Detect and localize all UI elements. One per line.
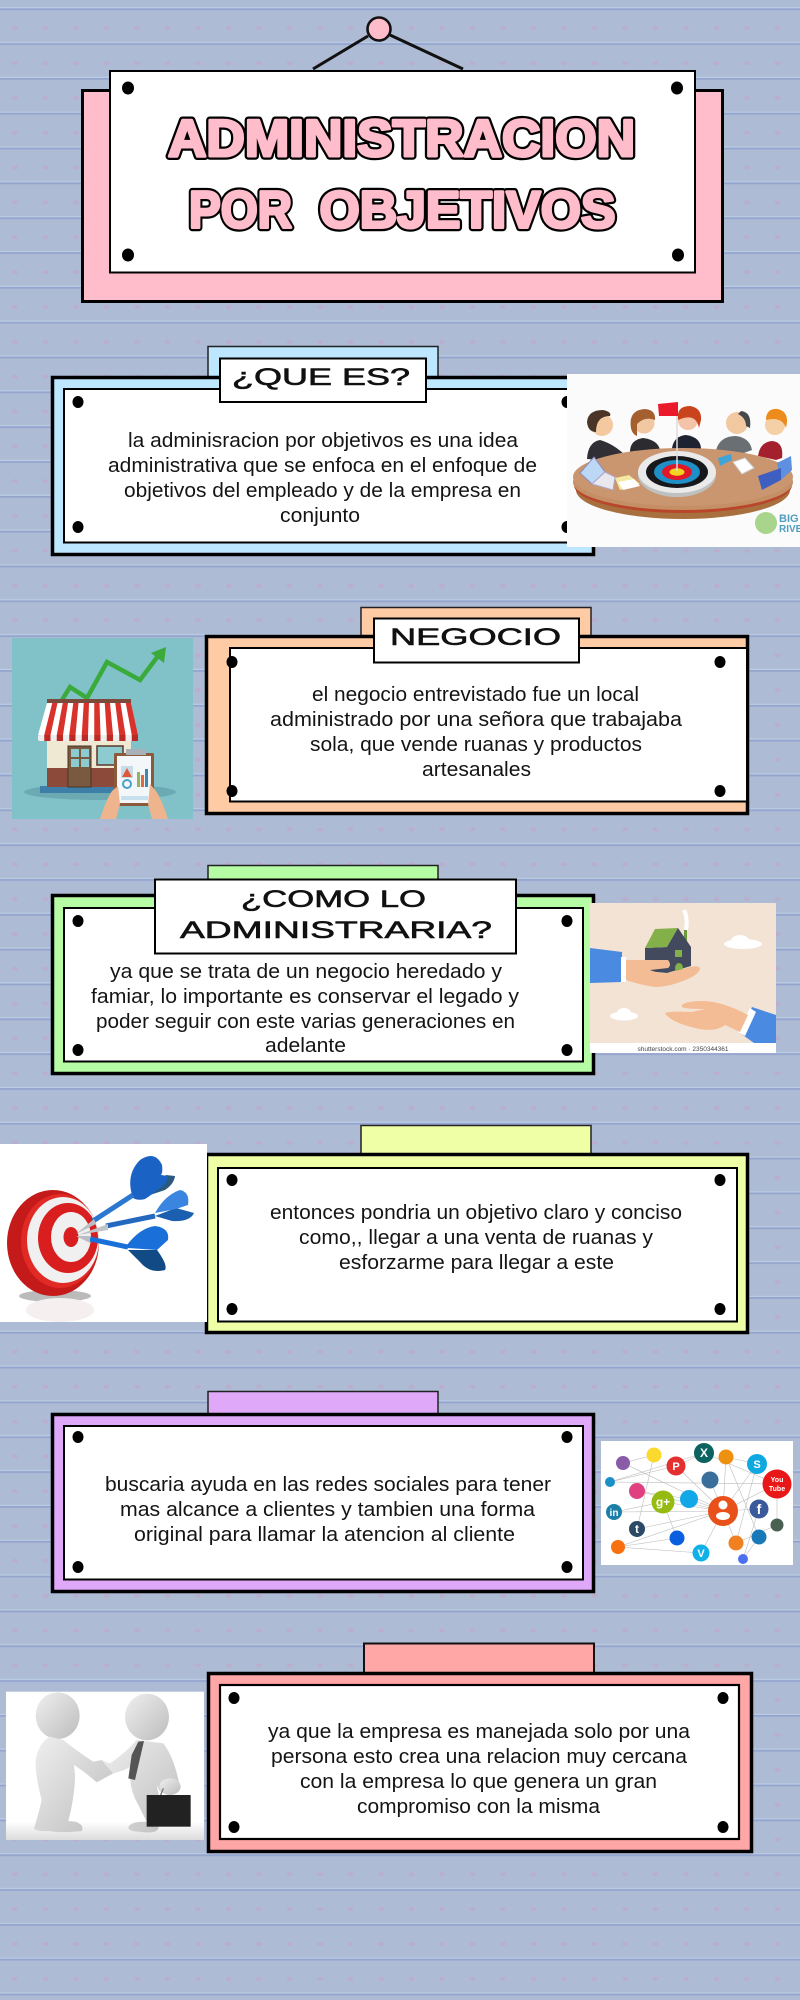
panel: redes sociales — [52, 1392, 594, 1592]
arrow — [62, 656, 158, 700]
node glyphs: You — [771, 1477, 783, 1484]
heading: ¿COMO LO — [241, 886, 426, 913]
left figure — [34, 1692, 113, 1832]
heading — [374, 618, 579, 662]
pink backing — [82, 90, 722, 302]
node glyphs: f — [757, 1501, 762, 1517]
nodes — [605, 1443, 792, 1564]
body text: conjunto — [280, 505, 360, 527]
body text: compromiso con la misma — [357, 1796, 601, 1818]
card backing — [208, 1674, 752, 1852]
dart 3 — [76, 1226, 168, 1271]
image: shop with growth arrow — [12, 638, 193, 819]
node glyphs: t — [635, 1522, 639, 1536]
card body — [64, 389, 583, 542]
card body — [64, 1426, 583, 1580]
title: ADMINISTRACION — [168, 110, 635, 168]
links — [610, 1453, 777, 1559]
image: team meeting around target — [567, 374, 800, 547]
pins — [226, 656, 726, 797]
node glyphs: V — [697, 1548, 705, 1560]
table — [576, 461, 790, 519]
body text: buscaria ayuda en las redes sociales para tener — [105, 1474, 551, 1496]
card backing — [206, 636, 748, 814]
laptops and papers — [580, 457, 605, 484]
shadow — [19, 1290, 91, 1302]
body text: artesanales — [422, 759, 531, 781]
body text: famiar, lo importante es conservar el legado y — [91, 986, 519, 1008]
panel: compromiso — [208, 1644, 752, 1852]
awning — [47, 699, 131, 703]
card body — [64, 908, 583, 1062]
panel: title sign — [82, 18, 722, 302]
panel: como lo administraria — [52, 866, 594, 1074]
card backing — [52, 896, 594, 1074]
body text — [270, 1202, 682, 1274]
target — [638, 453, 716, 497]
body text — [108, 430, 537, 527]
pins — [72, 915, 572, 1056]
body text: sola, que vende ruanas y productos — [310, 734, 642, 756]
node glyphs: S — [753, 1459, 761, 1471]
card body — [220, 1685, 739, 1839]
body text: ya que se trata de un negocio heredado y — [110, 961, 502, 983]
pins — [226, 1174, 726, 1315]
panel: negocio — [206, 608, 748, 814]
body text: objetivos del empleado y de la empresa en — [124, 480, 521, 502]
body text: persona esto crea una relacion muy cercana — [271, 1746, 688, 1768]
pins — [72, 396, 572, 533]
node glyphs: g+ — [656, 1495, 670, 1509]
image: hands passing a house — [590, 903, 776, 1053]
tab — [364, 1644, 594, 1674]
clouds — [724, 939, 762, 949]
card backing — [52, 378, 594, 554]
body text — [105, 1474, 551, 1546]
icon: hanger — [313, 18, 463, 69]
title: ADMINISTRACION — [168, 110, 635, 168]
body text: con la empresa lo que genera un gran — [300, 1771, 657, 1793]
target — [7, 1190, 99, 1296]
people — [587, 406, 787, 462]
image: team meeting around target: BIG — [779, 513, 799, 525]
tab — [208, 1392, 438, 1416]
body text: administrativa que se enfoca en el enfoque de — [108, 455, 537, 477]
tab — [208, 346, 438, 378]
image: darts hitting target — [0, 1144, 207, 1322]
body text: entonces pondria un objetivo claro y conciso — [270, 1202, 682, 1224]
body text: administrado por una señora que trabajaba — [270, 709, 683, 731]
briefcase — [147, 1788, 191, 1827]
body text: adelante — [265, 1035, 346, 1057]
body text: poder seguir con este varias generaciones en — [96, 1011, 515, 1033]
image: social network graph — [601, 1441, 793, 1565]
heading: NEGOCIO — [390, 624, 561, 651]
shop wall — [47, 741, 131, 769]
card backing — [52, 1414, 594, 1592]
clipboard and hands — [114, 753, 154, 806]
logo — [755, 512, 777, 534]
pins — [228, 1692, 728, 1833]
dart 2 — [78, 1190, 194, 1235]
body text: el negocio entrevistado fue un local — [312, 684, 639, 706]
flag — [676, 402, 678, 471]
node glyphs: P — [672, 1461, 680, 1473]
body text: ya que la empresa es manejada solo por una — [268, 1721, 691, 1743]
node glyphs — [610, 1446, 785, 1560]
panel: objetivo — [206, 1126, 748, 1332]
right figure — [102, 1694, 181, 1832]
panel: que es — [52, 346, 594, 554]
dart 1 — [76, 1156, 175, 1234]
title: POR — [189, 182, 292, 240]
body text: mas alcance a clientes y tambien una forma — [120, 1499, 536, 1521]
heading: ADMINISTRARIA? — [180, 917, 492, 944]
heading: ¿QUE ES? — [232, 364, 410, 391]
body text: la adminisracion por objetivos es una idea — [128, 430, 519, 452]
card body — [230, 648, 747, 802]
image: hands passing a house: shutterstock.com · 2350344361 — [637, 1046, 729, 1053]
node glyphs: X — [700, 1446, 708, 1460]
title: POR — [189, 182, 292, 240]
heading — [155, 880, 516, 954]
body text: esforzarme para llegar a este — [339, 1252, 614, 1274]
board pins — [122, 82, 684, 262]
body text — [91, 961, 519, 1057]
tab — [361, 1126, 591, 1156]
pins — [72, 1431, 572, 1573]
lower hand — [740, 1007, 776, 1043]
title: OBJETIVOS — [320, 182, 616, 240]
tab — [361, 608, 591, 638]
upper hand — [590, 948, 622, 983]
title — [168, 110, 635, 240]
tie — [128, 1741, 144, 1780]
node glyphs: Tube — [769, 1486, 785, 1493]
body text — [268, 1721, 691, 1818]
card backing — [206, 1154, 748, 1332]
heading — [220, 358, 426, 402]
body text: original para llamar la atencion al cliente — [134, 1524, 515, 1546]
card body — [218, 1168, 737, 1322]
body text — [270, 684, 683, 781]
image: two figures shaking hands — [6, 1692, 204, 1840]
title: OBJETIVOS — [320, 182, 616, 240]
house — [684, 910, 687, 930]
body text: como,, llegar a una venta de ruanas y — [299, 1227, 653, 1249]
node glyphs: in — [610, 1508, 618, 1519]
tab — [208, 866, 438, 896]
white board — [110, 71, 695, 272]
